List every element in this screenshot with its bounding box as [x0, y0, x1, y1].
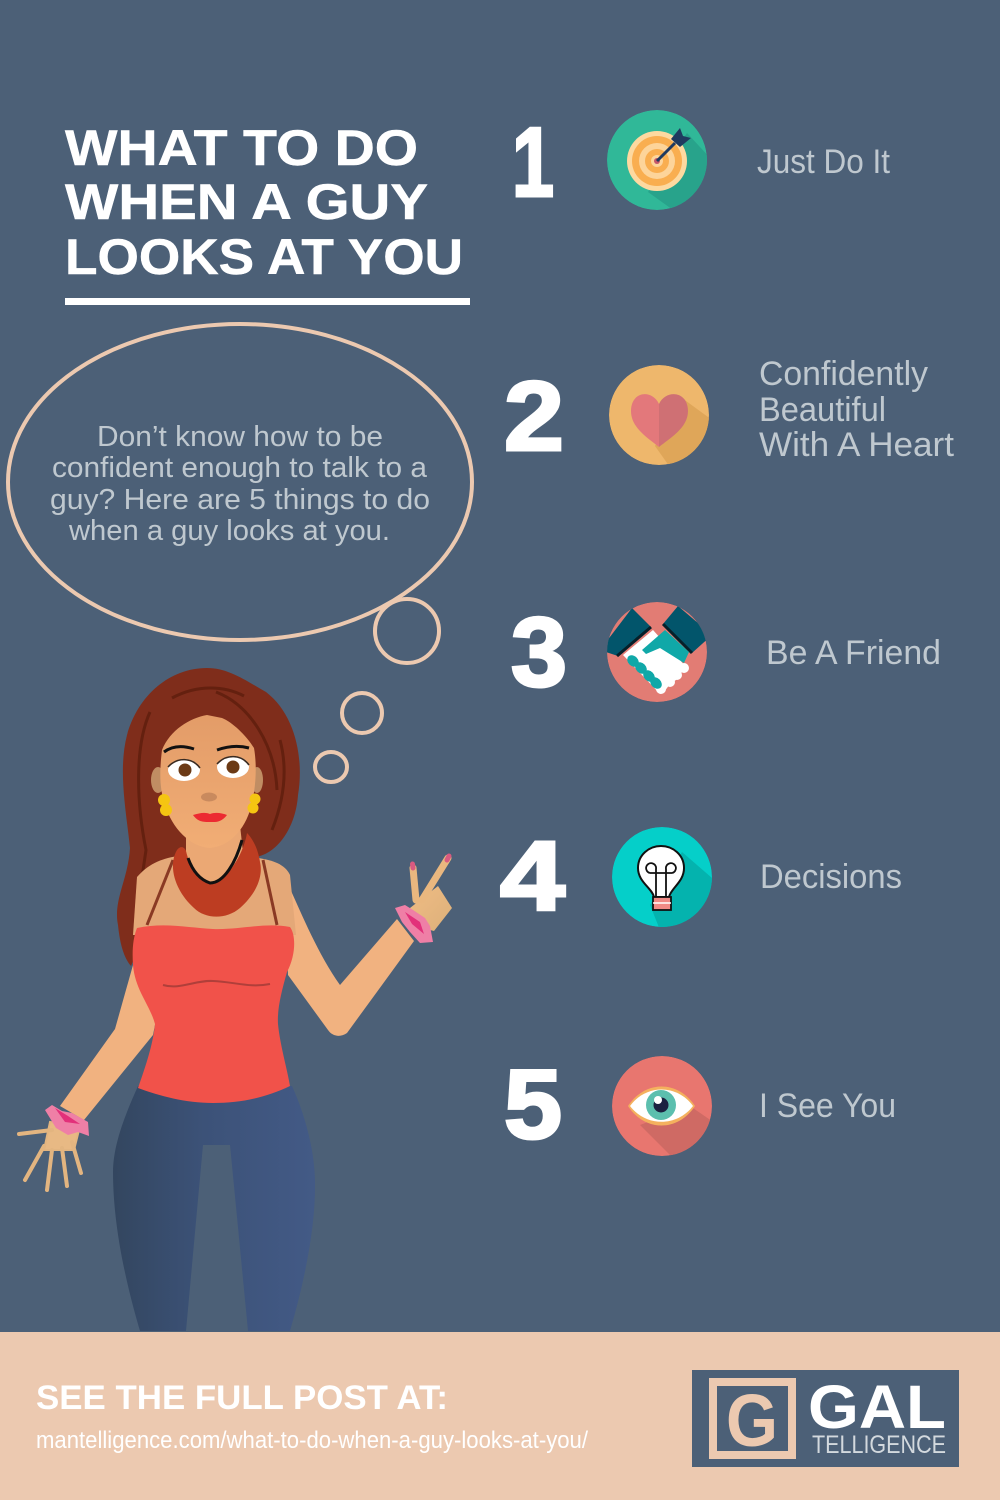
label: Confidently Beautiful With A Heart: With A Heart: [759, 426, 955, 464]
title: WHEN A GUY: [65, 174, 428, 230]
number 4: 4: [500, 821, 565, 931]
left hand: [19, 1122, 81, 1190]
left arm: [60, 965, 160, 1120]
step 3: [511, 597, 941, 707]
intro text: confident enough to talk to a: [52, 452, 428, 484]
lips: [193, 813, 227, 822]
footer band: [0, 1332, 1000, 1500]
icon: eye: [612, 1056, 712, 1156]
step 1: [516, 110, 890, 210]
logo: G: [726, 1379, 778, 1462]
red top: [133, 925, 294, 1103]
scarf: [173, 833, 261, 917]
ears: [151, 767, 263, 793]
left scrunchie: [45, 1105, 89, 1136]
footer heading: SEE THE FULL POST AT:: [36, 1379, 448, 1417]
label: Confidently Beautiful With A Heart: Beautiful: [759, 391, 886, 429]
icon: target: [607, 110, 712, 215]
label: I See You: I See You: [759, 1087, 896, 1125]
eyes: [168, 756, 249, 781]
icon: heart: [609, 365, 712, 470]
label: Just Do It: Just Do It: [757, 143, 891, 181]
icon: handshake: [607, 602, 707, 702]
earrings: [158, 794, 260, 816]
face: [160, 715, 256, 848]
shoulders and chest: [133, 856, 296, 935]
label: Be A Friend: Be A Friend: [766, 634, 941, 672]
straps: [147, 860, 277, 925]
number 1: 1: [512, 107, 554, 217]
logo: GAL: [808, 1373, 946, 1441]
brows: [164, 746, 249, 752]
thought bubble: [8, 324, 472, 782]
title: WHAT TO DO: [65, 120, 418, 176]
label: Confidently Beautiful With A Heart: Confidently: [759, 355, 928, 393]
intro text: guy? Here are 5 things to do: [50, 484, 430, 516]
title: LOOKS AT YOU: [65, 229, 463, 285]
title: [65, 120, 470, 305]
number 5: 5: [504, 1049, 562, 1159]
intro text: [50, 421, 430, 547]
number 2: 2: [504, 361, 564, 471]
jeans: [113, 1086, 315, 1331]
number 3: 3: [511, 597, 567, 707]
footer url: mantelligence.com/what-to-do-when-a-guy-looks-at-you/: [36, 1427, 588, 1454]
right scrunchie: [395, 905, 433, 943]
right hand: [410, 856, 452, 931]
step 2: [504, 355, 955, 471]
logo: [692, 1370, 959, 1467]
right arm: [285, 878, 414, 1036]
step 4: [500, 827, 901, 927]
hair: [117, 668, 300, 966]
label: Confidently Beautiful With A Heart: [759, 355, 955, 464]
intro text: Don’t know how to be: [97, 421, 383, 453]
woman illustration: [19, 668, 452, 1331]
nose: [201, 792, 217, 802]
intro text: when a guy looks at you.: [68, 515, 390, 547]
label: Decisions: Decisions: [760, 858, 902, 896]
logo: TELLIGENCE: [812, 1431, 946, 1459]
neckline shadow: [188, 840, 242, 883]
step 5: [505, 1056, 894, 1156]
icon: light bulb: [612, 827, 712, 927]
neck: [186, 825, 244, 890]
